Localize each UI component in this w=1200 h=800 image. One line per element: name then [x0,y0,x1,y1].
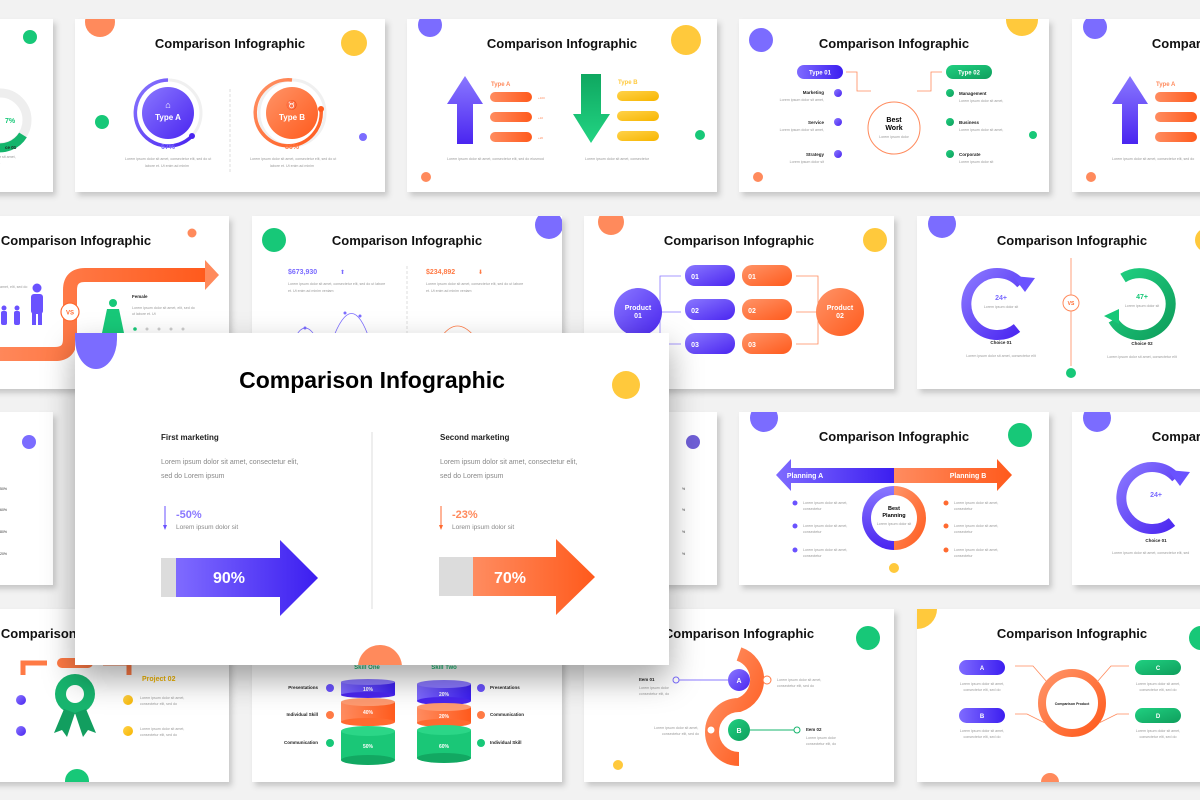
product 02 [816,288,864,336]
slide: row3 right partial: Lorem ipsum dolor sit amet, consectetur elit, sed [1112,551,1189,555]
center ring: Lorem ipsum dolor sit [877,522,911,526]
slide: arrows with pills: Lorem ipsum dolor sit amet, consectetur elit, sed do eiusmod [447,157,544,161]
pills: 03 [691,342,699,349]
slide: best work: Service [808,120,824,125]
slide: row3 hidden: % [682,552,685,556]
slide: product comparison [584,209,894,389]
slide: best work: Marketing [803,90,824,95]
slide: S-curve items: Item 01 [639,677,655,682]
slide: row3 left partial: 60% [0,508,7,512]
pill: Type 01: Type 01 [809,70,832,76]
slide: row2 people vs: Lorem ipsum dolor sit amet, elit, sed do [132,306,195,310]
cycle right: 47+ [1136,294,1148,301]
cycle left: Lorem ipsum dolor sit [984,305,1018,309]
slide: row2 people vs [0,216,229,389]
slide: planning A vs B: consectetur [803,507,822,511]
pill: Type 01 [797,65,843,79]
slide: row3 hidden [669,412,722,592]
slide: row2 people vs: amet, elit, sed do [0,285,27,289]
slide: cycle choices [917,210,1200,389]
progress arrow 70% [439,539,595,615]
down arrow [573,74,610,143]
cylinders skill two: 20% [439,692,450,698]
slide: cylinders skills: Presentations [490,685,520,690]
slide: best work: Lorem ipsum dolor sit amet, [780,128,824,132]
slide: type A vs type B rings [75,7,385,192]
value right: et. Ut enim ad minim veniam [426,289,472,293]
slide: comparison product: consectetur elit, sed do [964,735,1000,739]
slide: S-curve items: Lorem ipsum dolor [639,686,670,690]
slide: S-curve items: Lorem ipsum dolor [806,736,837,740]
cylinders skill one: 40% [363,710,374,716]
slide: row2 people vs: ut labore et. Ut [132,312,156,316]
value left: Lorem ipsum dolor sit amet, consectetur elit, sed do ut labore [288,282,385,286]
pills orange: +10 [538,116,543,120]
pill: Type 02 [946,65,992,79]
female icon [102,299,124,333]
pills orange [490,82,545,142]
people icons [1,284,43,325]
center ring: Comparison Product [1055,702,1090,706]
cycle right: Lorem ipsum dolor sit [1125,304,1159,308]
slide: planning A vs B: Lorem ipsum dolor sit amet, [803,524,847,528]
main slide: marketing comparison [75,333,669,689]
value right: Lorem ipsum dolor sit amet, consectetur elit, sed do ut labore [426,282,523,286]
title: Comparison Infographic [487,36,637,51]
slide: cylinders skills: Skill One [354,665,380,671]
slide: comparison product: Lorem ipsum dolor sit amet, [960,729,1004,733]
text block [125,158,336,167]
product 01: 01 [634,313,642,320]
slide: row3 hidden: % [682,487,685,491]
center ring [1042,673,1102,733]
slide: best work: Lorem ipsum dolor sit [790,160,824,164]
panel: first marketing: First marketing [161,433,219,442]
pills A B C D: D [1156,714,1161,720]
slide: comparison product: consectetur elit, sed do [1140,688,1176,692]
line chart [298,313,472,333]
text block: ce 01 [5,145,17,150]
text block: Lorem ipsum dolor sit amet, consectetur elit, sed do ut [125,157,211,161]
slide: planning A vs B: consectetur [803,530,822,534]
panel: second marketing [439,433,595,615]
slide: row4 badge projects: consectetur elit, sed do [140,702,177,706]
slide: row2 people vs: Comparison Infographic [1,233,151,248]
panel: first marketing: Lorem ipsum dolor sit [176,524,238,531]
icon: green dot [23,30,37,44]
slide: row3 left partial [0,412,53,585]
slide: cylinders skills [252,609,562,782]
slide: line chart values [252,216,568,333]
center circle: Work [885,125,903,132]
ring: Type A [135,80,201,151]
pills: 01 [691,274,699,281]
cylinders skill one: 10% [363,687,374,693]
ring: Type B: 86% [285,144,300,151]
title: Comparison Infographic [239,367,505,393]
decoration: orange circle [358,645,402,689]
text block: Lorem ipsum dolor sit amet, consectetur elit, sed do ut [250,157,336,161]
center ring: Planning [882,513,906,519]
panel: first marketing: -50% [176,509,202,521]
panel: second marketing: Second marketing [440,433,509,442]
up arrow [447,76,483,144]
value right: $234,892 [426,269,455,276]
product 02: Product [827,305,854,312]
slide: comparison product: Lorem ipsum dolor sit amet, [960,682,1004,686]
slide: row1 right partial [1072,15,1200,192]
slide: row3 right partial [1072,404,1200,585]
pills A B C D [959,660,1181,723]
slide: line chart values: Comparison Infographic [332,233,482,248]
slide: best work [739,4,1049,192]
value right: ⬇ [478,269,483,276]
slide: best work: Lorem ipsum dolor sit amet, [959,128,1003,132]
slide: row3 left partial: 80% [0,530,7,534]
cycle right: Lorem ipsum dolor sit amet, consectetur elit [1107,355,1177,359]
ring: Type B: ♉ [286,99,298,110]
cylinders skill one: 50% [363,744,374,750]
slide: cylinders skills: Skill Two [431,665,457,671]
slide: cycle choices: VS [1068,301,1075,307]
center circle [868,102,920,154]
slide: S-curve items: Lorem ipsum dolor sit amet, [654,726,698,730]
S curve: B [736,728,742,735]
decoration: yellow dot [612,371,640,399]
slide: cylinders skills: Individual Skill [286,712,318,717]
title: Comparison Infographic [819,36,969,51]
ring: Type A: Type A [155,113,181,122]
pills [685,265,792,354]
slide: cylinders skills: Individual Skill [490,740,522,745]
text block [0,146,16,164]
text block: labore et. Ut enim ad minim [145,164,189,168]
slide: S-curve items: consectetur elit, do [806,742,836,746]
slide: planning A vs B: consectetur [954,530,973,534]
slide: planning A vs B: Lorem ipsum dolor sit amet, [954,524,998,528]
panel: second marketing: sed do Lorem ipsum [440,473,504,480]
slide: planning A vs B: Lorem ipsum dolor sit amet, [954,501,998,505]
slide: row1 partial donut [0,19,53,192]
slide: S-curve items: consectetur elit, sed do [777,684,814,688]
slide: cylinders skills: Communication [284,740,318,745]
slide: planning A vs B: Lorem ipsum dolor sit amet, [803,501,847,505]
double arrow: Planning A [787,473,823,480]
orange path arrow: VS [66,310,74,316]
progress arrow 90%: 90% [213,570,245,587]
cylinders skill two: 60% [439,744,450,750]
slide: best work: Lorem ipsum dolor sit amet, [780,98,824,102]
title: Comparison Infographic [155,36,305,51]
slide: comparison product: Lorem ipsum dolor sit amet, [1136,729,1180,733]
slide: row4 badge projects [0,609,229,793]
pills orange: +20 [538,136,543,140]
slide: row1 right partial: Lorem ipsum dolor sit amet, consectetur elit, sed do [1112,157,1194,161]
list left [834,89,842,158]
slide: planning A vs B: consectetur [954,507,973,511]
list right [946,89,954,158]
value left [288,269,385,293]
double arrow: Planning B [950,473,986,480]
ring: Type B: Type B [279,113,305,122]
slide: comparison product: Comparison Infographic [997,626,1147,641]
panel: second marketing: Lorem ipsum dolor sit amet, consectetur elit, [440,459,577,466]
value right [426,269,523,293]
slide: row4 badge projects: consectetur elit, sed do [140,733,177,737]
pills A B C D: A [980,666,985,672]
pills yellow: Type B [618,80,638,86]
S curve [707,654,771,759]
progress arrow 90% [161,540,318,616]
slide: comparison product: Lorem ipsum dolor sit amet, [1136,682,1180,686]
cylinders skill two: 20% [439,714,450,720]
slide: row3 hidden: % [682,530,685,534]
cycle left: Lorem ipsum dolor sit amet, consectetur elit [966,354,1036,358]
slide: planning A vs B [739,404,1049,585]
slide: S-curve items [584,609,894,782]
center circle: Lorem ipsum dolor [879,135,910,139]
slide: planning A vs B: consectetur [954,554,973,558]
slide: comparison product: consectetur elit, sed do [1140,735,1176,739]
cylinders skill one [341,679,395,765]
badge icon [54,674,96,737]
slide: planning A vs B: consectetur [803,554,822,558]
ring: Type A: 67% [161,144,176,151]
slide: best work: Corporate [959,152,981,157]
slide: planning A vs B: Comparison Infographic [819,429,969,444]
slide: comparison product: consectetur elit, sed do [964,688,1000,692]
cycle left [966,273,1036,358]
double arrow [776,459,1012,491]
ring: Type A: ⌂ [165,100,171,110]
slide: row4 badge projects: Lorem ipsum dolor sit amet, [140,727,184,731]
slide: best work: Business [959,120,980,125]
slide: comparison product [897,589,1200,791]
pills A B C D: C [1156,666,1161,672]
product 02: 02 [836,313,844,320]
slide: best work: Lorem ipsum dolor sit amet, [959,99,1003,103]
slide: planning A vs B: Lorem ipsum dolor sit amet, [954,548,998,552]
slide: arrows with pills [407,13,717,192]
panel: second marketing: -23% [452,509,478,521]
panel: first marketing [161,433,318,616]
product 01: Product [625,305,652,312]
slide: S-curve items: Item 02 [806,727,822,732]
value left: ⬆ [340,269,345,276]
cylinders skill two [417,680,471,763]
pills A B C D: B [980,714,985,720]
pills orange: +100 [538,96,545,100]
center ring: Best [888,506,900,512]
slide: row3 left partial: 20% [0,552,7,556]
icon: down arrow purple [163,506,167,530]
panel: second marketing: Lorem ipsum dolor sit [452,524,514,531]
pills orange: Type A [491,82,511,88]
slide: row3 right partial: 24+ [1150,492,1162,499]
pills: 01 [748,274,756,281]
slide: S-curve items: consectetur elit, sed do [662,732,699,736]
slide: row3 right partial: Choice 01 [1145,538,1167,543]
slide: cycle choices: Comparison Infographic [997,233,1147,248]
ring: Type B [255,80,325,151]
progress arrow 70%: 70% [494,570,526,587]
slide: row3 left partial: 50% [0,487,7,491]
cycle right: Choice 02 [1131,341,1153,346]
orange path arrow [0,260,219,354]
slide: row4 badge projects: Comparison Infographic [1,626,151,641]
slide: row3 hidden: % [682,508,685,512]
slide: arrows with pills: Lorem ipsum dolor sit amet, consectetur [585,157,650,161]
cycle left: 24+ [995,295,1007,302]
slide: best work: Lorem ipsum dolor sit [959,160,993,164]
slide: row1 right partial: Type A [1156,82,1176,88]
slide: product comparison: Comparison Infographic [664,233,814,248]
slide: S-curve items: Lorem ipsum dolor sit amet, [777,678,821,682]
S curve: A [736,678,742,685]
value left: et. Ut enim ad minim veniam [288,289,334,293]
pill: Type 02: Type 02 [958,70,981,76]
slide: cylinders skills: Presentations [288,685,318,690]
cycle left: Choice 01 [990,340,1012,345]
donut chart: 7% [5,118,16,125]
slide: S-curve items: consectetur elit, do [639,692,669,696]
value left: $673,930 [288,269,317,276]
pills: 03 [748,342,756,349]
slide: row2 people vs: Female [132,294,148,299]
product 01 [614,288,662,336]
icon: down arrow orange [439,506,443,530]
pills yellow [617,80,659,141]
center ring [862,486,926,550]
slide: row4 badge projects: Project 02 [142,676,176,683]
slide: S-curve items: Comparison Infographic [664,626,814,641]
slide: best work: Management [959,91,987,96]
panel: first marketing: Lorem ipsum dolor sit amet, consectetur elit, [161,459,298,466]
slide: row4 badge projects: Lorem ipsum dolor sit amet, [140,696,184,700]
panel: first marketing: sed do Lorem ipsum [161,473,225,480]
cycle right [1104,273,1177,359]
slide: planning A vs B: Lorem ipsum dolor sit amet, [803,548,847,552]
slide: cylinders skills: Communication [490,712,524,717]
decoration: purple half disc [75,333,117,369]
pills: 02 [748,308,756,315]
text block: labore et. Ut enim ad minim [270,164,314,168]
pills: 02 [691,308,699,315]
center circle: Best [886,117,902,124]
slide: best work: Strategy [806,152,824,157]
